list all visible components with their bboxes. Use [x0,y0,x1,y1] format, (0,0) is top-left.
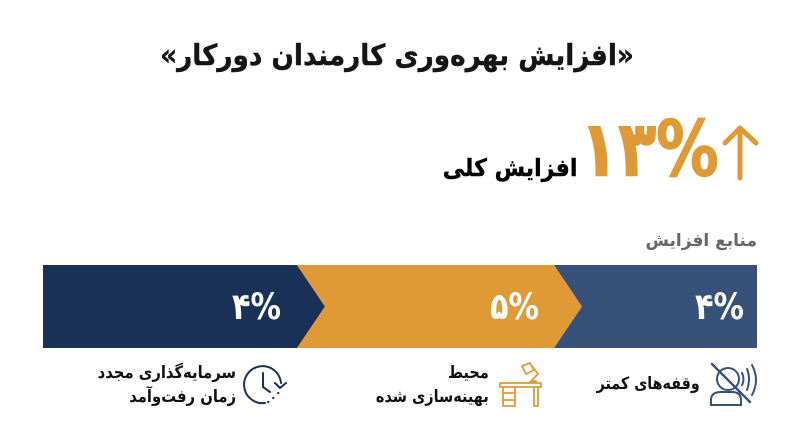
label: optimized environment: محیط [448,363,489,383]
segment: interruptions [554,265,757,348]
label: reinvested commute time: زمان رفت‌وآمد [129,387,236,407]
big number 13%: ۱۳% [580,104,719,194]
value: 4% commute: ۴% [232,285,281,328]
segment: commute [43,265,325,348]
segment: environment [297,265,582,348]
value: 5% environment: ۵% [490,285,539,328]
label: optimized environment: بهینه‌سازی شده [376,387,489,407]
total increase label: افزایش کلی [442,154,577,182]
sources heading: منابع افزایش [645,231,757,251]
label: reinvested commute time [98,362,236,407]
label: fewer interruptions: وقفه‌های کمتر [597,374,700,394]
title: «افزایش بهره‌وری کارمندان دورکار» [160,38,634,72]
label: reinvested commute time: سرمایه‌گذاری مجدد [98,363,236,383]
label: optimized environment [376,363,489,407]
value: 4% interruptions: ۴% [695,285,744,328]
